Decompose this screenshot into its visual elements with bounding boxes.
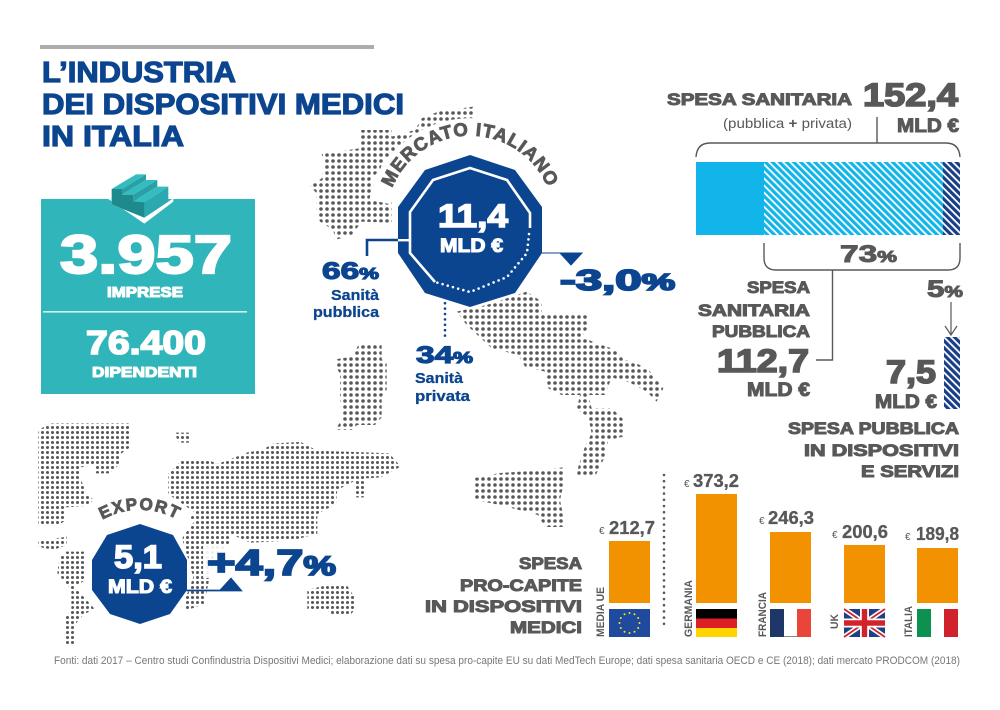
lower bracket <box>764 243 960 270</box>
imprese label: IMPRESE <box>107 284 183 301</box>
stat: 66% sanità pubblica <box>313 258 380 321</box>
label: spesa pubblica in dispositivi: E SERVIZI <box>861 463 959 481</box>
stat halo <box>203 546 339 578</box>
arc heading halo <box>92 514 188 530</box>
bar: Francia <box>757 508 814 637</box>
bar: media UE <box>595 518 655 637</box>
divider <box>43 311 247 313</box>
title: DEI DISPOSITIVI MEDICI <box>42 89 404 121</box>
unit: MLD € <box>897 116 959 137</box>
bar: media UE: MEDIA UE <box>595 587 607 637</box>
stat: 66% sanità pubblica: pubblica <box>313 304 380 321</box>
label: spesa pubblica in dispositivi: SPESA PUBBLICA <box>788 420 959 438</box>
badge: 5,1 mld: 5,1 <box>114 539 162 575</box>
badge: 11,4 mld: MLD € <box>440 236 503 257</box>
panel: spesa pro-capite <box>425 471 959 637</box>
value: 7,5: MLD € <box>875 392 937 413</box>
arrow: down <box>945 302 957 335</box>
stat: 34% sanità privata: Sanità <box>415 370 464 387</box>
stat: -3,0%: -3,0 % <box>560 265 675 297</box>
label: spesa pubblica in dispositivi <box>788 420 959 481</box>
hatched bar <box>944 337 960 409</box>
value: 112,7 <box>717 343 810 401</box>
panel: imprese e dipendenti <box>41 174 255 394</box>
map: Italy dots <box>310 107 663 527</box>
bar: Italia: ITALIA <box>903 606 915 637</box>
label: spesa sanitaria pubblica: SPESA <box>747 279 810 297</box>
subtitle: (pubblica + privata) <box>723 116 852 131</box>
bar: Francia: € <box>759 516 765 527</box>
heading: spesa pro-capite: PRO-CAPITE <box>460 577 582 595</box>
flag: Germany <box>696 609 737 637</box>
flag: EU <box>609 609 650 637</box>
panel: export <box>92 498 336 624</box>
bar: UK: 200,6 <box>842 522 888 542</box>
bar: Francia: FRANCIA <box>757 592 769 637</box>
flag: Italy <box>917 609 958 637</box>
heading: Mercato italiano: MERCATO ITALIANO <box>380 122 558 188</box>
badge: 11,4 mld <box>398 155 542 307</box>
bar: media UE: 212,7 <box>609 518 655 538</box>
flag: France <box>770 609 811 637</box>
bar: Italia: 189,8 <box>916 524 959 544</box>
stat: 34% sanità privata: privata <box>415 388 471 405</box>
dipendenti number: 76.400 <box>86 324 206 361</box>
icon: factory blocks <box>107 174 173 224</box>
title: L’INDUSTRIA <box>42 57 236 89</box>
title rule <box>40 45 374 49</box>
value: 73%: 73 % <box>840 241 897 268</box>
connector <box>816 270 832 360</box>
value: 112,7: MLD € <box>747 380 810 401</box>
map: world dots <box>38 423 401 645</box>
value: 5%: 5 % <box>927 276 963 303</box>
dipendenti label: DIPENDENTI <box>92 364 197 381</box>
bar: Germania: 373,2 <box>693 471 739 491</box>
title <box>42 57 404 153</box>
stat: 66% sanità pubblica: Sanità <box>331 287 380 304</box>
bar: UK <box>829 522 888 637</box>
label: spesa sanitaria pubblica: SANITARIA <box>698 302 810 320</box>
bar: UK: € <box>832 530 838 541</box>
heading: spesa pro-capite: SPESA <box>519 555 582 573</box>
value: 152,4: 152,4 <box>863 77 958 113</box>
bar: UK: UK <box>829 614 841 629</box>
value: 7,5 <box>875 354 937 413</box>
bar: Germania: € <box>684 479 690 490</box>
bar: Francia: 246,3 <box>768 508 814 528</box>
stat: +4,7%: +4,7 % <box>207 542 336 583</box>
arrow: decrease <box>542 253 582 265</box>
label: spesa sanitaria pubblica: PUBBLICA <box>712 323 810 341</box>
stat: 34% sanità privata <box>415 342 473 405</box>
bar: Italia <box>903 524 959 637</box>
imprese number: 3.957 <box>60 225 232 285</box>
value: 112,7: 112,7 <box>717 343 809 379</box>
panel: spesa sanitaria <box>667 77 963 481</box>
panel: mercato italiano <box>313 118 676 405</box>
value: 7,5: 7,5 <box>886 354 936 390</box>
stacked bar <box>696 162 960 235</box>
heading: spesa sanitaria: SPESA SANITARIA <box>667 91 852 109</box>
badge: 11,4 mld: 11,4 <box>438 198 508 234</box>
flag: UK <box>844 609 885 637</box>
connector: sanità privata <box>444 287 446 336</box>
arrow: increase <box>187 578 242 591</box>
heading: export: EXPORT <box>98 498 182 520</box>
title: IN ITALIA <box>42 121 184 153</box>
bar: media UE: € <box>599 526 605 537</box>
heading: spesa pro-capite: MEDICI <box>510 619 582 637</box>
heading: spesa pro-capite <box>425 555 582 637</box>
bar: Germania <box>683 471 739 637</box>
heading: spesa pro-capite: IN DISPOSITIVI <box>425 598 582 616</box>
top bracket <box>696 117 960 157</box>
badge: 5,1 mld <box>92 524 187 624</box>
badge: 5,1 mld: MLD € <box>108 577 172 598</box>
separator <box>663 475 665 629</box>
stat: 66% sanità pubblica: 66 % <box>322 258 379 285</box>
connector: sanità pubblica <box>367 240 398 256</box>
bar: Italia: € <box>905 532 911 543</box>
label: spesa pubblica in dispositivi: IN DISPOSITIVI <box>804 442 959 460</box>
stat: 34% sanità privata: 34 % <box>416 342 473 369</box>
arc heading halo <box>380 129 560 202</box>
label: spesa sanitaria pubblica <box>698 279 810 341</box>
bar: Germania: GERMANIA <box>683 580 695 637</box>
